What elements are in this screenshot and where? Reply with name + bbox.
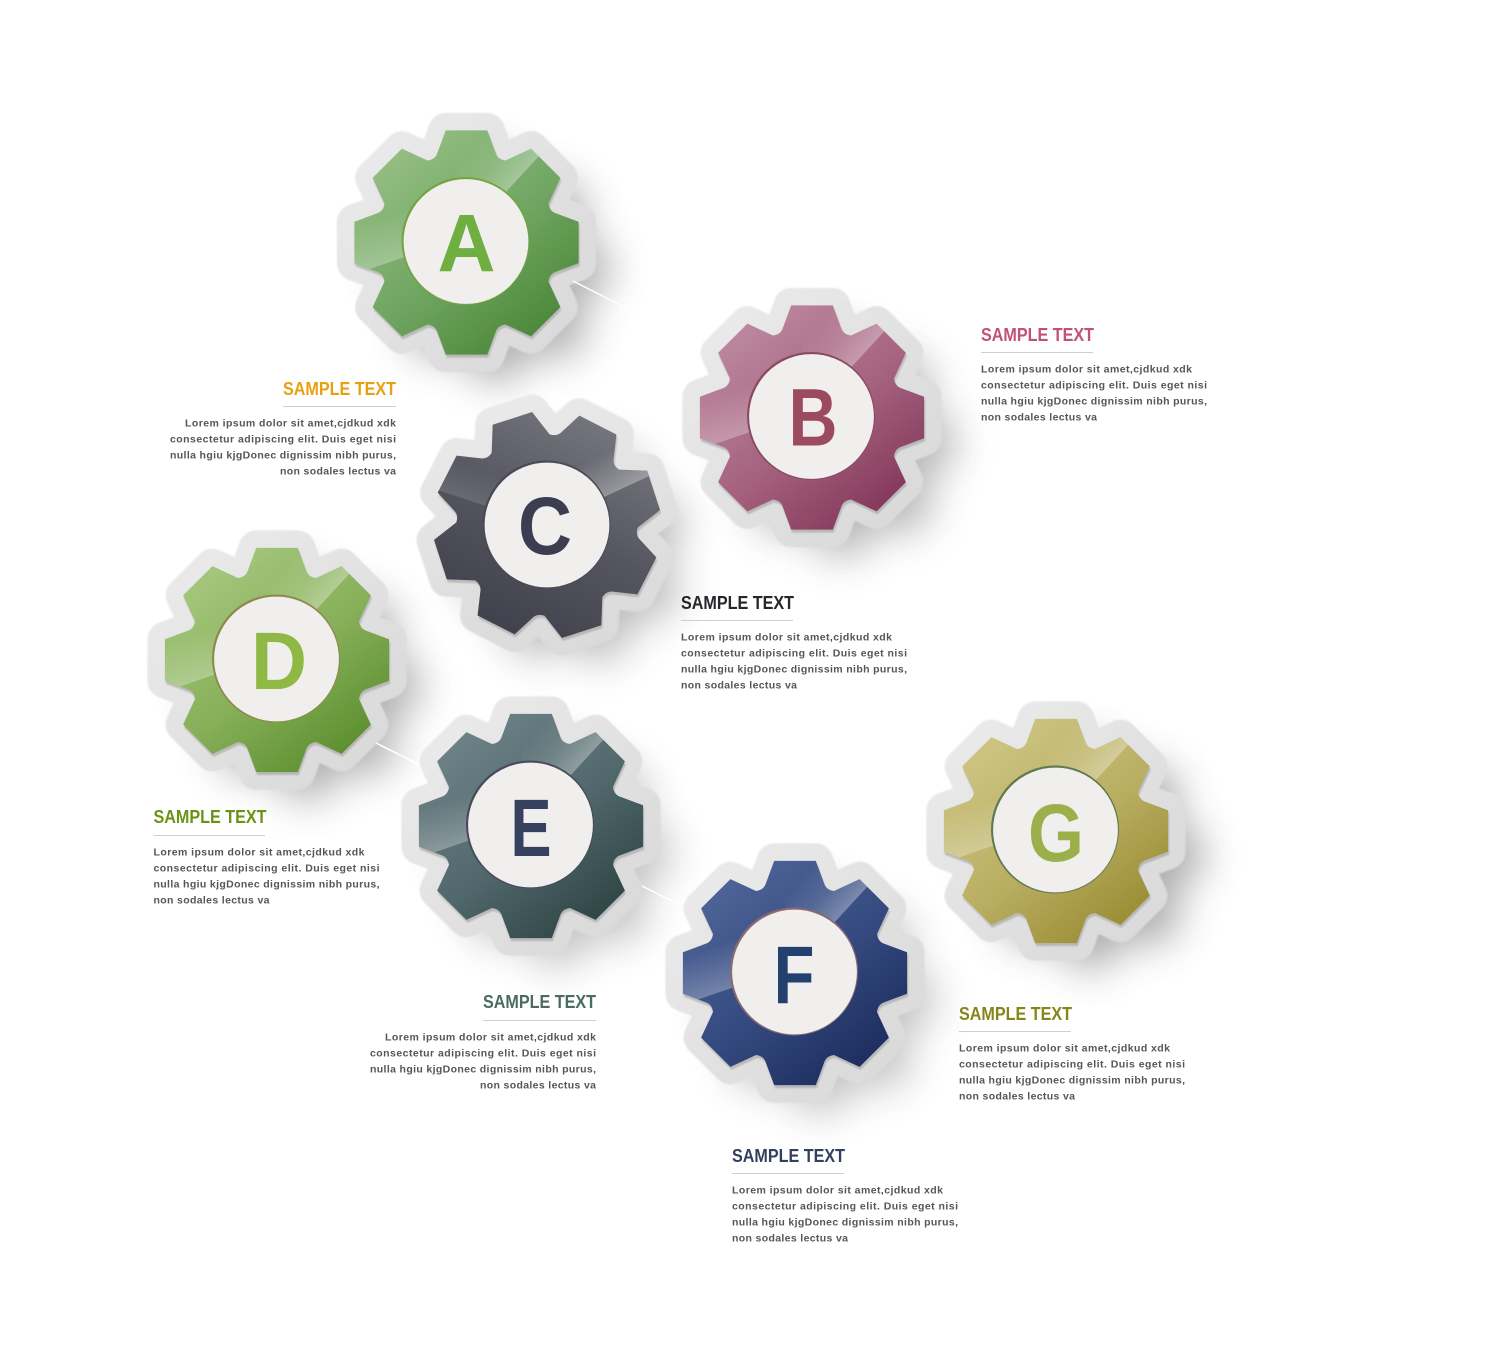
body A: Lorem ipsum dolor sit amet,cjdkud xdk <box>185 418 396 430</box>
body C <box>681 632 907 692</box>
letter G: G <box>1028 788 1084 879</box>
body F: consectetur adipiscing elit. Duis eget nisi <box>732 1200 958 1212</box>
gear A <box>336 108 609 381</box>
letter C: C <box>518 481 572 572</box>
body D: non sodales lectus va <box>154 894 270 906</box>
text block E <box>370 991 597 1092</box>
body C: nulla hgiu kjgDonec dignissim nibh purus, <box>681 664 907 676</box>
letter B: B <box>788 372 838 464</box>
heading F: SAMPLE TEXT <box>732 1145 846 1166</box>
gear G <box>926 696 1202 967</box>
gear B <box>682 282 954 556</box>
text block G <box>959 1003 1185 1102</box>
heading G: SAMPLE TEXT <box>959 1003 1073 1024</box>
body D: Lorem ipsum dolor sit amet,cjdkud xdk <box>154 846 365 858</box>
body E: nulla hgiu kjgDonec dignissim nibh purus, <box>370 1064 596 1076</box>
body E <box>370 1032 596 1092</box>
body A: non sodales lectus va <box>280 466 396 478</box>
body F: nulla hgiu kjgDonec dignissim nibh purus, <box>732 1216 958 1228</box>
heading C: SAMPLE TEXT <box>681 592 795 613</box>
connector: gear A <box>573 281 632 311</box>
body G: consectetur adipiscing elit. Duis eget nisi <box>959 1058 1185 1070</box>
body D: nulla hgiu kjgDonec dignissim nibh purus, <box>154 878 380 890</box>
body B: non sodales lectus va <box>981 412 1097 424</box>
body A: consectetur adipiscing elit. Duis eget nisi <box>170 434 396 446</box>
body G: non sodales lectus va <box>959 1090 1075 1102</box>
letter D: D <box>251 616 307 707</box>
body F: Lorem ipsum dolor sit amet,cjdkud xdk <box>732 1184 943 1196</box>
gear C <box>416 394 700 678</box>
heading E: SAMPLE TEXT <box>483 991 597 1012</box>
text block F <box>732 1145 958 1244</box>
body C: Lorem ipsum dolor sit amet,cjdkud xdk <box>681 632 892 644</box>
gear D <box>147 525 419 798</box>
body B <box>981 364 1207 424</box>
body A: nulla hgiu kjgDonec dignissim nibh purus, <box>170 450 396 462</box>
body E: non sodales lectus va <box>480 1080 596 1092</box>
text block B <box>981 324 1207 424</box>
letter E: E <box>510 783 552 874</box>
text block A <box>170 378 397 478</box>
body B: Lorem ipsum dolor sit amet,cjdkud xdk <box>981 364 1192 376</box>
body D <box>154 846 380 906</box>
body E: Lorem ipsum dolor sit amet,cjdkud xdk <box>385 1032 596 1044</box>
body D: consectetur adipiscing elit. Duis eget nisi <box>154 862 380 874</box>
body C: non sodales lectus va <box>681 680 797 692</box>
body E: consectetur adipiscing elit. Duis eget nisi <box>370 1048 596 1060</box>
letter F: F <box>774 930 814 1021</box>
gear F <box>665 838 933 1111</box>
body G: Lorem ipsum dolor sit amet,cjdkud xdk <box>959 1042 1170 1054</box>
text block C <box>681 592 907 692</box>
gear E <box>401 691 669 964</box>
heading D: SAMPLE TEXT <box>154 806 267 827</box>
letter A: A <box>438 198 496 290</box>
connector: gear E to F <box>642 886 678 904</box>
body B: consectetur adipiscing elit. Duis eget nisi <box>981 380 1207 392</box>
text block D <box>154 806 380 906</box>
connector: gear D to E <box>376 743 422 766</box>
body F <box>732 1184 958 1244</box>
body B: nulla hgiu kjgDonec dignissim nibh purus, <box>981 396 1207 408</box>
body A <box>170 418 396 478</box>
body G: nulla hgiu kjgDonec dignissim nibh purus, <box>959 1074 1185 1086</box>
heading A: SAMPLE TEXT <box>283 378 397 399</box>
body G <box>959 1042 1185 1102</box>
heading B: SAMPLE TEXT <box>981 324 1095 345</box>
body C: consectetur adipiscing elit. Duis eget nisi <box>681 648 907 660</box>
body F: non sodales lectus va <box>732 1232 848 1244</box>
